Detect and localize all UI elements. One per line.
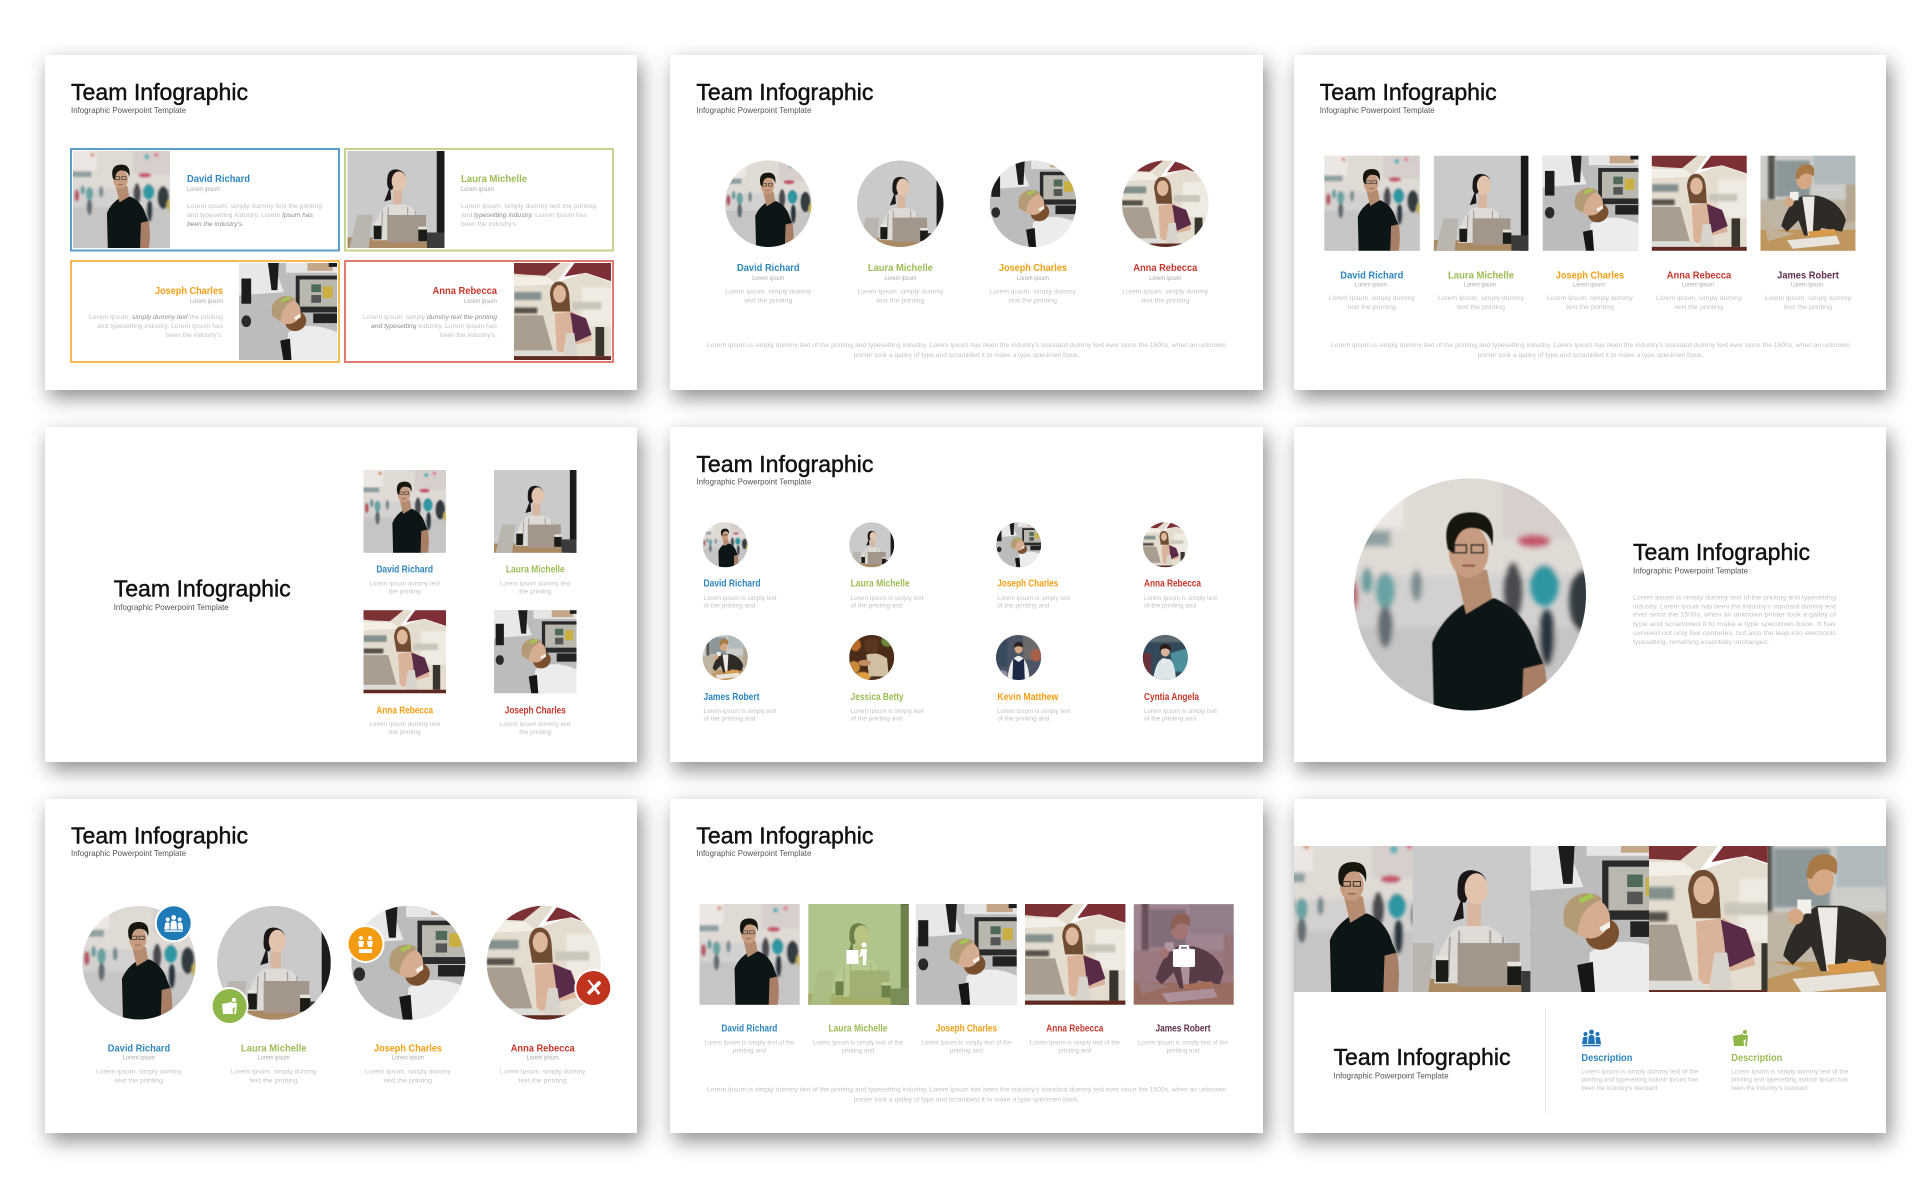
profile: David Richard: Lorem ipsum [123, 1054, 155, 1061]
description: team: Lorem Ipsum is simply dummy text of the [1581, 1068, 1699, 1075]
profile: Laura Michelle: Lorem ipsum [258, 1054, 290, 1061]
description: worker [1731, 1030, 1849, 1092]
card: David Richard: Lorem Ipsum. simply dummy text the printing [187, 203, 322, 210]
subtitle: Infographic Powerpoint Template [71, 105, 186, 115]
panel: title left, two by two portraits right [45, 427, 637, 762]
icon badge: team [155, 904, 193, 942]
card: Laura Michelle [338, 141, 613, 259]
subtitle: Infographic Powerpoint Template [1633, 565, 1748, 575]
icon: worker [846, 942, 867, 965]
profile: Joseph Charles [990, 160, 1076, 304]
panel: single large portrait with text [1294, 427, 1886, 783]
card: Anna Rebecca: been the industry's. [440, 332, 497, 339]
profile: Laura Michelle with green overlay [798, 894, 921, 1054]
title: Team Infographic [1633, 539, 1810, 565]
profile: Cyntia Angela [1142, 635, 1217, 722]
card: David Richard: and typesetting industry. Lorem Ipsum has [187, 212, 314, 219]
profile: David Richard [82, 906, 196, 1084]
panel: eight small circle portraits [670, 427, 1263, 762]
paragraph: printer took a galley of type and scrambled it to make a type specimen book. [854, 1096, 1080, 1103]
profile: Joseph Charles [486, 602, 585, 736]
paragraph: typesetting, remaining essentially unchanged. [1633, 639, 1769, 646]
card: David Richard: Lorem ipsum [187, 186, 220, 193]
profile: David Richard: David Richard [108, 1042, 170, 1054]
profile: James Robert with plum overlay: James Robert [1156, 1022, 1211, 1034]
profile: David Richard: the printing [389, 588, 421, 596]
card: Anna Rebecca [345, 253, 621, 372]
profile: Joseph Charles: text the printing [1566, 304, 1614, 311]
profile: Joseph Charles: Lorem Ipsum. simply dummy [365, 1068, 451, 1075]
profile: Joseph Charles: Lorem Ipsum. simply dummy [990, 288, 1076, 296]
profile: Jessica Betty: Jessica Betty [851, 691, 904, 703]
profile: Joseph Charles: text the printing [1009, 298, 1057, 304]
profile: Joseph Charles: Lorem ipsum [1017, 275, 1049, 282]
profile: Cyntia Angela: Cyntia Angela [1144, 691, 1199, 703]
icon badge: worker [211, 987, 249, 1025]
paragraph: Lorem Ipsum is simply dummy text of the printing and typesetting industry. Lorem Ipsum has been the industry's standard dummy text ever since the 1500s, when an unknown [1331, 342, 1850, 349]
profile: James Robert: text the printing [1784, 304, 1832, 311]
icon: briefcase [1173, 945, 1195, 967]
profile: Joseph Charles: text the printing [384, 1077, 432, 1084]
paragraph: ever since the 1500s, when an unknown printer took a galley of [1633, 612, 1836, 619]
profile: Laura Michelle: Lorem ipsum [884, 275, 916, 282]
profile: Laura Michelle: Lorem ipsum [1464, 282, 1496, 289]
profile: Joseph Charles: Lorem Ipsum is simply text [997, 595, 1070, 602]
subtitle: Infographic Powerpoint Template [1334, 1070, 1449, 1080]
title: Team Infographic [696, 451, 873, 477]
profile: David Richard [702, 522, 776, 609]
card: Anna Rebecca: Lorem ipsum [464, 298, 497, 305]
profile: David Richard: David Richard [704, 578, 760, 590]
card: Anna Rebecca: Anna Rebecca [432, 285, 497, 297]
profile: Cyntia Angela: of the printing and [1144, 716, 1196, 723]
profile: James Robert [702, 635, 776, 722]
paragraph: Lorem Ipsum is simply dummy text of the printing and typesetting industry. Lorem Ipsum has been the industry's standard dummy text ever since the 1500s, when an unknown [707, 1086, 1226, 1093]
profile: James Robert with plum overlay [1124, 894, 1244, 1054]
profile: Anna Rebecca: Lorem ipsum [527, 1054, 559, 1061]
profile: Joseph Charles: Joseph Charles [505, 704, 566, 716]
panel: four circle portraits [670, 55, 1263, 390]
title: Team Infographic [696, 822, 873, 848]
profile: Joseph Charles: of the printing and [997, 603, 1050, 610]
title: Team Infographic [71, 822, 248, 848]
profile: Laura Michelle [857, 160, 944, 304]
profile: David Richard: Lorem Ipsum dummy text [369, 581, 440, 588]
profile: Jessica Betty: Lorem Ipsum is simply text [851, 708, 924, 715]
profile: Joseph Charles: Lorem Ipsum dummy text [500, 721, 571, 728]
panel: five portraits with tinted overlays [670, 799, 1263, 1133]
profile: Laura Michelle: text the printing [1457, 304, 1505, 311]
profile: Anna Rebecca: Anna Rebecca [1667, 269, 1731, 281]
profile: Joseph Charles: Lorem ipsum [1573, 282, 1605, 289]
profile: Laura Michelle with green overlay: Laura Michelle [828, 1022, 888, 1034]
icon: team [1582, 1030, 1601, 1046]
profile: Anna Rebecca: Lorem Ipsum is simply text of the [1030, 1039, 1120, 1046]
profile: Anna Rebecca [1142, 522, 1217, 609]
photo strip [1260, 825, 1920, 1024]
profile: David Richard: Lorem ipsum [1355, 282, 1387, 289]
description: worker: Lorem Ipsum is simply dummy text of the [1731, 1068, 1849, 1075]
profile: Laura Michelle: Lorem Ipsum is simply text [851, 595, 924, 602]
profile: Laura Michelle: Lorem Ipsum. simply dummy [1438, 295, 1525, 302]
profile: Joseph Charles: Lorem ipsum [392, 1054, 424, 1061]
profile: David Richard: text the printing [115, 1077, 163, 1084]
profile: Anna Rebecca: Anna Rebecca [511, 1042, 575, 1054]
profile: Joseph Charles: printing and [950, 1047, 983, 1054]
paragraph [707, 1086, 1226, 1103]
card: Joseph Charles: and typesetting industry. Lorem Ipsum has [97, 323, 224, 330]
card: David Richard: been the industry's. [187, 221, 244, 228]
profile: Anna Rebecca: Anna Rebecca [1144, 578, 1201, 590]
profile: Joseph Charles: Lorem Ipsum. simply dummy [1547, 295, 1634, 302]
profile: David Richard: David Richard [1340, 269, 1403, 281]
profile: Anna Rebecca [486, 906, 601, 1084]
card: Joseph Charles: been the industry's. [166, 332, 223, 339]
profile: David Richard: Lorem Ipsum. simply dummy [96, 1068, 182, 1075]
profile: David Richard: Lorem Ipsum is simply text of the [704, 1039, 795, 1046]
profile: Laura Michelle: Lorem Ipsum. simply dummy [231, 1068, 317, 1075]
profile: Anna Rebecca: Lorem Ipsum. simply dummy [1656, 295, 1743, 302]
card: Laura Michelle: Lorem ipsum [461, 186, 494, 193]
panel: circle portraits with icon badges [45, 799, 637, 1133]
profile: Laura Michelle: text the printing [876, 298, 925, 304]
large circle portrait [1354, 478, 1586, 710]
profile: Joseph Charles: Lorem Ipsum is simply text of the [921, 1039, 1012, 1046]
card: Joseph Charles: Joseph Charles [155, 285, 223, 297]
profile: Anna Rebecca: Lorem Ipsum. simply dummy [1122, 288, 1209, 296]
subtitle: Infographic Powerpoint Template [696, 848, 812, 858]
profile: Joseph Charles: Joseph Charles [999, 262, 1067, 274]
card: Joseph Charles [71, 253, 346, 370]
title: Team Infographic [114, 576, 291, 602]
profile: Kevin Matthew [996, 635, 1070, 722]
profile: James Robert: Lorem Ipsum is simply text [704, 708, 777, 715]
profile: David Richard [725, 160, 812, 304]
profile: James Robert with plum overlay: Lorem Ipsum is simply text of the [1138, 1039, 1228, 1046]
profile: David Richard: David Richard [721, 1022, 777, 1034]
profile: Laura Michelle [486, 462, 586, 596]
profile: Anna Rebecca [355, 602, 454, 736]
profile: Cyntia Angela: Lorem Ipsum is simply text [1144, 708, 1217, 715]
card: Joseph Charles: Lorem ipsum [190, 298, 223, 305]
profile: Anna Rebecca: Lorem ipsum [1149, 275, 1181, 282]
icon badge: awards [346, 925, 384, 963]
profile: Kevin Matthew: Kevin Matthew [997, 691, 1059, 703]
profile: Joseph Charles [996, 522, 1070, 609]
profile: David Richard: David Richard [737, 262, 800, 274]
profile: Laura Michelle: Laura Michelle [241, 1042, 307, 1054]
profile: Laura Michelle: Laura Michelle [868, 262, 933, 274]
description: worker: printing and typesetting industr Ipsum has [1731, 1077, 1849, 1084]
profile: Joseph Charles [1534, 146, 1648, 311]
subtitle: Infographic Powerpoint Template [696, 105, 812, 115]
profile: Anna Rebecca: Lorem Ipsum is simply text [1144, 595, 1217, 602]
panel: photo strip with title and descriptions [1260, 799, 1920, 1133]
profile: Laura Michelle: Laura Michelle [851, 578, 910, 590]
profile: James Robert with plum overlay: printing and [1166, 1047, 1200, 1054]
profile: Anna Rebecca: Lorem Ipsum. simply dummy [500, 1068, 586, 1075]
card: Joseph Charles: Lorem Ipsum. simply dummy text the printing [89, 314, 223, 321]
description: worker: been the industry's standard [1731, 1085, 1807, 1092]
profile: Anna Rebecca: text the printing [519, 1077, 567, 1084]
profile: James Robert [1751, 146, 1865, 311]
title: Team Infographic [1334, 1044, 1510, 1070]
paragraph: Lorem Ipsum is simply dummy text of the printing and typesetting industry. Lorem Ipsum has been the industry's standard dummy text ever since the 1500s, when an unknown [707, 342, 1226, 349]
profile: James Robert: Lorem Ipsum. simply dummy [1765, 295, 1852, 302]
profile: Jessica Betty: of the printing and [851, 716, 903, 723]
card: Anna Rebecca: Lorem Ipsum. simply dummy text the printing [363, 314, 497, 321]
card: David Richard: David Richard [187, 173, 250, 185]
card: David Richard [63, 141, 339, 265]
paragraph: printer took a galley of type and scrambled it to make a type specimen book. [854, 352, 1080, 359]
profile: Anna Rebecca: text the printing [1675, 304, 1723, 311]
paragraph: industry. Lorem Ipsum has been the industry's standard dummy text [1633, 603, 1836, 610]
profile: David Richard: Lorem Ipsum. simply dummy [725, 288, 812, 296]
icon: worker [1733, 1030, 1748, 1046]
panel: five square portraits [1294, 55, 1886, 390]
profile: Laura Michelle: Lorem Ipsum. simply dummy [857, 288, 944, 296]
profile: Anna Rebecca: Anna Rebecca [376, 704, 433, 716]
subtitle: Infographic Powerpoint Template [696, 477, 812, 487]
profile: Jessica Betty [849, 635, 924, 722]
profile: Laura Michelle [849, 522, 924, 609]
profile: David Richard: Lorem Ipsum is simply text [704, 595, 777, 602]
profile: David Richard: Lorem Ipsum. simply dummy [1329, 295, 1415, 302]
profile: Laura Michelle: Lorem Ipsum dummy text [500, 581, 571, 588]
profile: Laura Michelle [1424, 146, 1540, 311]
profile: David Richard: of the printing and [704, 603, 756, 610]
profile: Laura Michelle with green overlay: Lorem Ipsum is simply text of the [813, 1039, 903, 1046]
profile: Joseph Charles: the printing [519, 729, 551, 736]
description: team: Description [1581, 1052, 1632, 1064]
profile: Anna Rebecca: Lorem Ipsum dummy text [369, 721, 440, 728]
card: Laura Michelle: and typesetting industry. Lorem Ipsum has [461, 212, 588, 219]
profile: David Richard [1315, 146, 1429, 311]
profile: Kevin Matthew: of the printing and [997, 716, 1050, 723]
profile: Anna Rebecca: of the printing and [1144, 603, 1196, 610]
profile: James Robert: James Robert [1777, 269, 1839, 281]
title: Team Infographic [1320, 79, 1497, 105]
paragraph: Lorem Ipsum is simply dummy text of the printing and typesetting [1633, 594, 1836, 601]
profile: Laura Michelle with green overlay: printing and [842, 1047, 875, 1054]
profile: Anna Rebecca: Anna Rebecca [1046, 1022, 1103, 1034]
subtitle: Infographic Powerpoint Template [71, 848, 186, 858]
profile: Kevin Matthew: Lorem Ipsum is simply text [997, 708, 1070, 715]
description: team: been the industry's standard [1581, 1085, 1658, 1092]
profile: Laura Michelle: the printing [519, 588, 551, 596]
card: Laura Michelle: Lorem Ipsum. simply dummy text the printing [461, 203, 596, 210]
description: team [1581, 1030, 1699, 1092]
profile: Joseph Charles: Joseph Charles [1556, 269, 1624, 281]
profile: James Robert: James Robert [704, 691, 760, 703]
profile: Laura Michelle: Laura Michelle [1448, 269, 1514, 281]
profile: Joseph Charles: Joseph Charles [936, 1022, 997, 1034]
subtitle: Infographic Powerpoint Template [1320, 105, 1435, 115]
profile: Anna Rebecca: text the printing [1141, 298, 1190, 304]
profile: Laura Michelle [217, 906, 331, 1084]
paragraph: survived not only five centuries, but also the leap into electronic [1633, 630, 1837, 637]
panel: four bordered profile cards [45, 55, 637, 390]
card: Anna Rebecca: and typesetting industry. Lorem Ipsum has [371, 323, 498, 330]
profile: David Richard: David Richard [376, 564, 433, 576]
card: Laura Michelle: Laura Michelle [461, 173, 527, 185]
paragraph [707, 342, 1226, 359]
icon badge: tools [574, 969, 612, 1007]
title: Team Infographic [696, 79, 873, 105]
profile: Anna Rebecca [1642, 146, 1756, 311]
title: Team Infographic [71, 79, 248, 105]
description: worker: Description [1731, 1052, 1782, 1064]
paragraph [1331, 342, 1850, 359]
profile: David Richard: text the printing [1348, 304, 1396, 311]
profile: Anna Rebecca: the printing [389, 729, 421, 736]
card: Laura Michelle: been the industry's. [461, 221, 518, 228]
profile: Anna Rebecca: Anna Rebecca [1133, 262, 1197, 274]
profile: Laura Michelle: Laura Michelle [506, 564, 565, 576]
profile: Anna Rebecca: printing and [1058, 1047, 1091, 1054]
subtitle: Infographic Powerpoint Template [114, 602, 229, 612]
profile: James Robert: of the printing and [704, 716, 756, 723]
profile: David Richard [689, 894, 810, 1054]
paragraph [1633, 594, 1837, 646]
profile: Anna Rebecca: Lorem ipsum [1682, 282, 1714, 289]
profile: David Richard: Lorem ipsum [752, 275, 784, 282]
paragraph: type and scrambled it to make a type specimen book. It has [1633, 621, 1837, 628]
profile: Joseph Charles [351, 906, 466, 1084]
profile: David Richard: printing and [733, 1047, 766, 1054]
profile: Laura Michelle: of the printing and [851, 603, 903, 610]
profile: David Richard [355, 462, 454, 596]
paragraph: printer took a galley of type and scrambled it to make a type specimen book. [1478, 352, 1704, 359]
profile: Joseph Charles [906, 894, 1027, 1054]
profile: Joseph Charles: Joseph Charles [374, 1042, 442, 1054]
description: team: printing and typesetting industr Ipsum has [1581, 1077, 1699, 1084]
profile: James Robert: Lorem ipsum [1791, 282, 1823, 289]
profile: Joseph Charles: Joseph Charles [997, 578, 1058, 590]
profile: David Richard: text the printing [744, 298, 793, 304]
profile: Anna Rebecca [1015, 894, 1135, 1054]
profile: Anna Rebecca [1122, 160, 1208, 304]
profile: Laura Michelle: text the printing [250, 1077, 298, 1084]
